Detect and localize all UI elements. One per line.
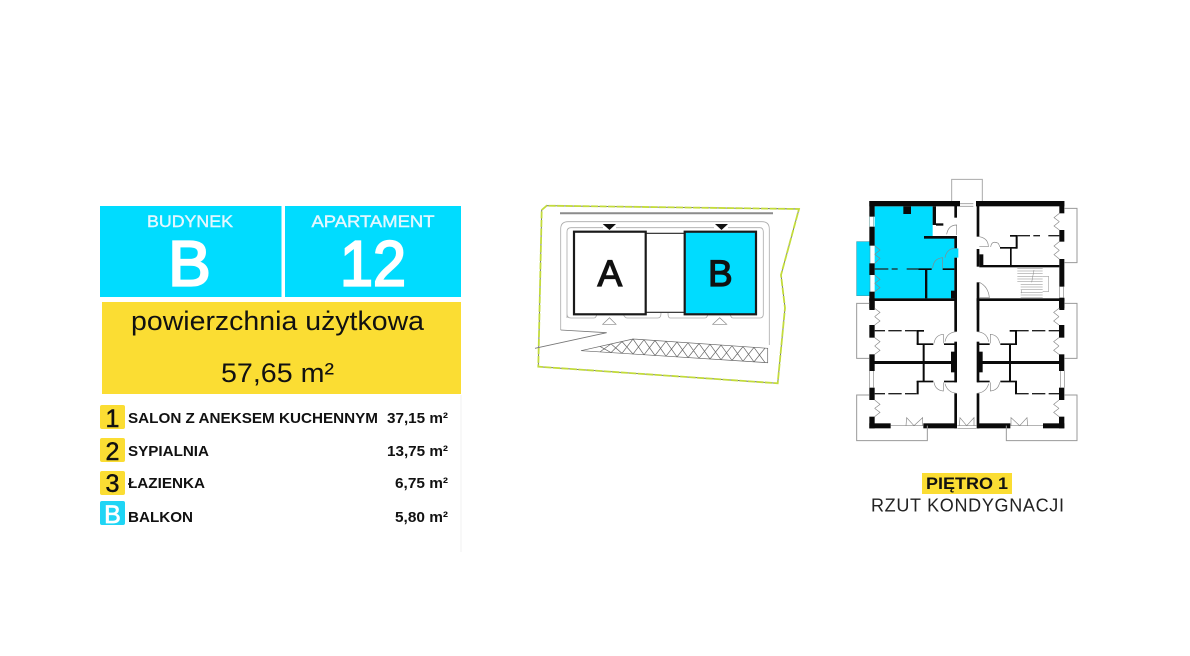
apartment number: 12 <box>340 228 406 300</box>
row: bedroom <box>100 438 448 466</box>
building letter: B <box>168 228 211 300</box>
building A: A <box>597 253 622 294</box>
doors and windows <box>869 208 1077 298</box>
entrance markers <box>603 224 728 324</box>
walls <box>869 201 1064 310</box>
building A <box>574 232 646 314</box>
parking <box>581 339 768 363</box>
staircase <box>1017 268 1049 298</box>
panel: usable area <box>102 302 461 394</box>
plot boundary <box>538 206 799 383</box>
usable area value: 57,65 m² <box>221 358 334 388</box>
building B highlighted: B <box>708 253 733 294</box>
row: balcony <box>100 501 448 529</box>
floor number badge: PIĘTRO 1 <box>926 474 1008 493</box>
row: balcony: BALKON <box>128 509 193 526</box>
floor label <box>871 473 1064 516</box>
usable area label: powierzchnia użytkowa <box>131 306 425 336</box>
floor plan lower part <box>857 298 1077 441</box>
panel: room list <box>100 395 461 552</box>
row: bedroom: 2 <box>106 438 119 466</box>
building B highlighted <box>685 232 756 314</box>
row: balcony: 5,80 m² <box>395 509 448 526</box>
row: bedroom: 13,75 m² <box>387 443 448 460</box>
apartment 12 highlight <box>857 206 958 298</box>
row: bathroom: 6,75 m² <box>395 475 448 492</box>
row: living room: SALON Z ANEKSEM KUCHENNYM <box>128 410 378 427</box>
row: living room: 1 <box>106 405 119 433</box>
entrance porch <box>952 179 982 206</box>
floor plan upper part <box>857 179 1077 310</box>
floor plan caption: RZUT KONDYGNACJI <box>871 496 1064 516</box>
heading: budynek: BUDYNEK <box>147 213 233 231</box>
row: bathroom <box>100 470 448 498</box>
partition dashes <box>875 236 1059 269</box>
row: balcony: B <box>104 501 121 529</box>
row: living room: 37,15 m² <box>387 410 448 427</box>
row: living room <box>100 405 448 433</box>
panel: building label <box>100 206 282 300</box>
site roads <box>535 213 773 348</box>
floor plan <box>857 179 1077 441</box>
row: bathroom: ŁAZIENKA <box>128 475 205 492</box>
corridor exit door <box>957 418 977 428</box>
heading: apartament: APARTAMENT <box>312 213 434 231</box>
row: bedroom: SYPIALNIA <box>128 443 209 460</box>
row: bathroom: 3 <box>106 470 119 498</box>
site plan <box>535 206 799 383</box>
panel: apartment label <box>285 206 461 300</box>
